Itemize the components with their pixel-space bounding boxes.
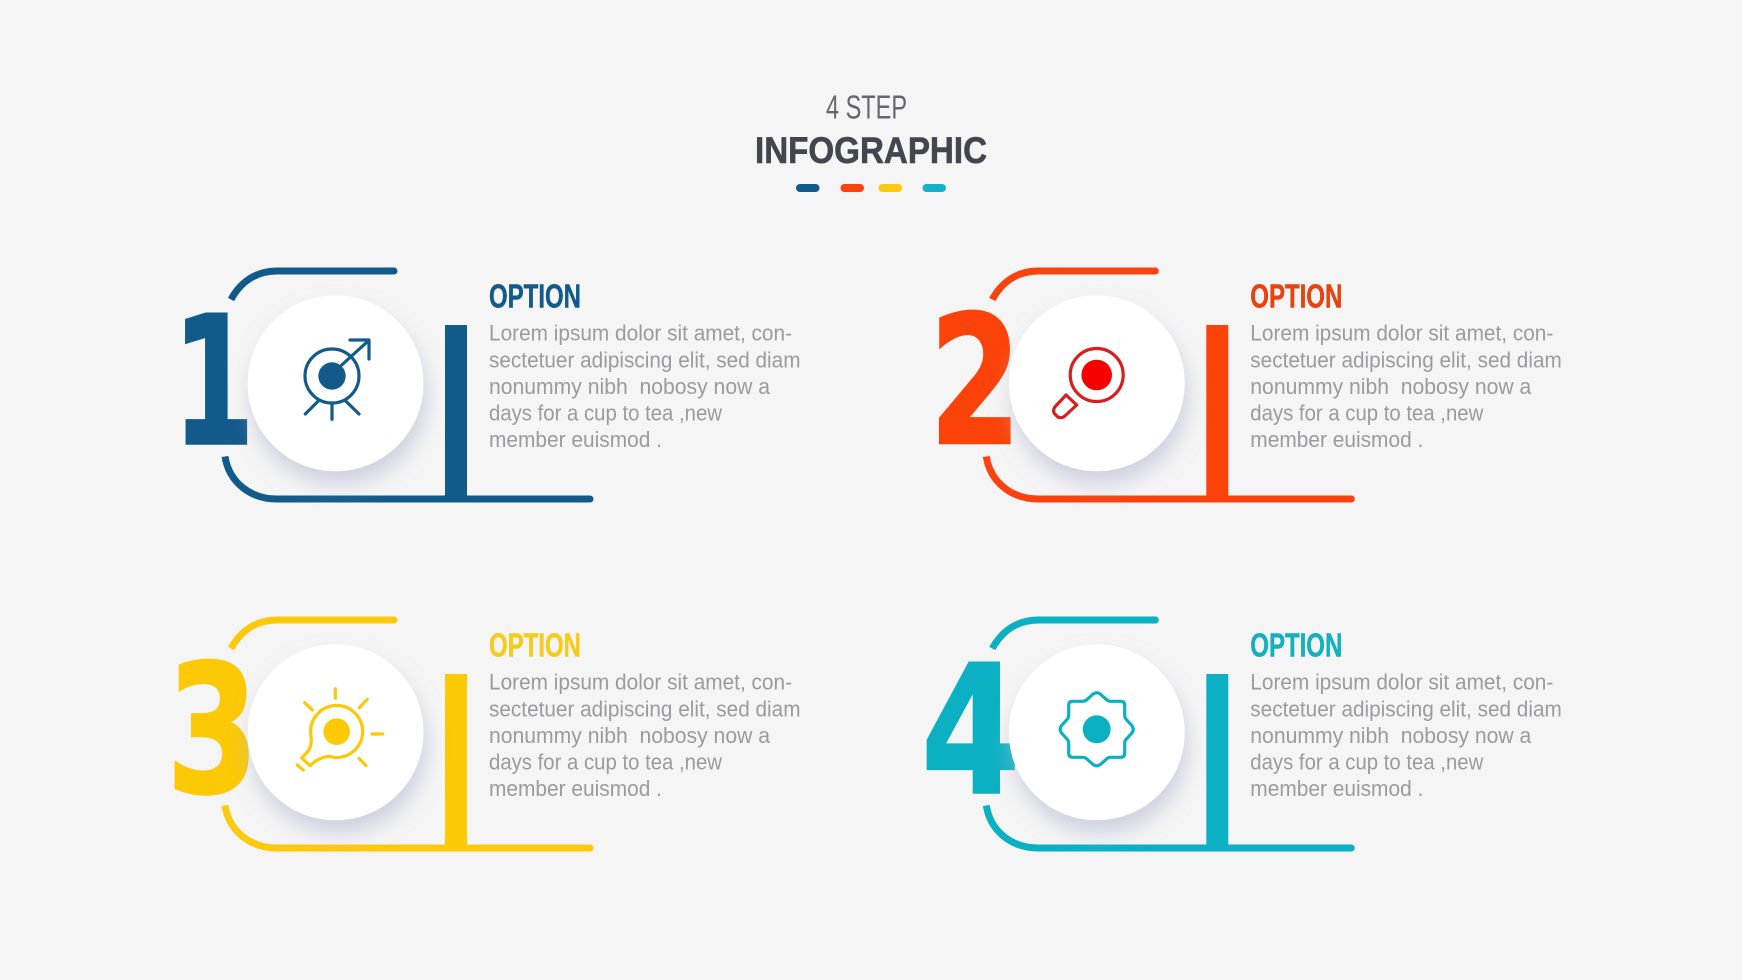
- vertical bar: [445, 674, 467, 848]
- title: [755, 88, 987, 192]
- option 2 heading: OPTION: [1250, 278, 1342, 314]
- option 2 body text: sectetuer adipiscing elit, sed diam: [1250, 347, 1562, 372]
- option 3 body text: [489, 670, 800, 801]
- subtitle: 4 step: 4 STEP: [826, 88, 907, 126]
- number 3: 3: [167, 627, 258, 834]
- top bracket: [231, 271, 394, 300]
- icon: magnifier: [1054, 348, 1123, 418]
- vertical bar: [445, 325, 467, 499]
- top bracket: [992, 620, 1155, 648]
- option 1 body text: nonummy nibh nobosy now a: [489, 374, 771, 399]
- vertical bar: [1206, 674, 1228, 848]
- vertical bar: [1206, 325, 1228, 499]
- option 3 body text: member euismod .: [489, 776, 662, 801]
- option 1 body text: member euismod .: [489, 427, 662, 452]
- bottom bracket: [986, 806, 1351, 848]
- colour key pills: [796, 184, 946, 192]
- icon: gear badge: [1060, 693, 1133, 766]
- option 4 body text: member euismod .: [1250, 776, 1423, 801]
- number 1: 1: [173, 278, 254, 486]
- white circle: [248, 295, 424, 471]
- option 2 body text: Lorem ipsum dolor sit amet, con-: [1250, 321, 1553, 346]
- bottom bracket: [225, 456, 590, 499]
- option 3 body text: nonummy nibh nobosy now a: [489, 723, 771, 748]
- panel: option 3: [167, 620, 801, 848]
- white circle: [248, 644, 424, 820]
- option 3 body text: days for a cup to tea ,new: [489, 750, 722, 775]
- top bracket: [992, 271, 1155, 300]
- option 1 body text: sectetuer adipiscing elit, sed diam: [489, 347, 800, 372]
- option 2 body text: [1250, 321, 1562, 452]
- bottom bracket: [225, 806, 590, 848]
- option 2 body text: member euismod .: [1250, 427, 1423, 452]
- icon: target with arrow: [305, 340, 369, 419]
- option 3 heading: OPTION: [489, 626, 581, 664]
- option 2 body text: nonummy nibh nobosy now a: [1250, 374, 1532, 399]
- bottom bracket: [986, 456, 1351, 499]
- option 4 body text: nonummy nibh nobosy now a: [1250, 723, 1532, 748]
- heading: infographic: INFOGRAPHIC: [755, 130, 987, 171]
- option 4 body text: sectetuer adipiscing elit, sed diam: [1250, 696, 1562, 721]
- option 1 body text: days for a cup to tea ,new: [489, 401, 722, 426]
- option 1 body text: Lorem ipsum dolor sit amet, con-: [489, 321, 792, 346]
- panel: option 1: [173, 271, 800, 499]
- top bracket: [231, 620, 394, 648]
- option 3 body text: sectetuer adipiscing elit, sed diam: [489, 696, 800, 721]
- option 2 body text: days for a cup to tea ,new: [1250, 401, 1483, 426]
- option 1 heading: OPTION: [489, 278, 581, 314]
- option 4 heading: OPTION: [1250, 626, 1342, 664]
- option 4 body text: [1250, 670, 1562, 801]
- option 3 body text: Lorem ipsum dolor sit amet, con-: [489, 670, 792, 695]
- number 2: 2: [929, 278, 1021, 485]
- number 4: 4: [921, 628, 1020, 836]
- white circle: [1009, 295, 1185, 471]
- white circle: [1009, 644, 1185, 820]
- option 4 body text: days for a cup to tea ,new: [1250, 750, 1483, 775]
- icon: light bulb: [297, 689, 383, 770]
- panel: option 4: [921, 620, 1562, 848]
- option 1 body text: [489, 321, 800, 452]
- panel: option 2: [929, 271, 1562, 499]
- option 4 body text: Lorem ipsum dolor sit amet, con-: [1250, 670, 1553, 695]
